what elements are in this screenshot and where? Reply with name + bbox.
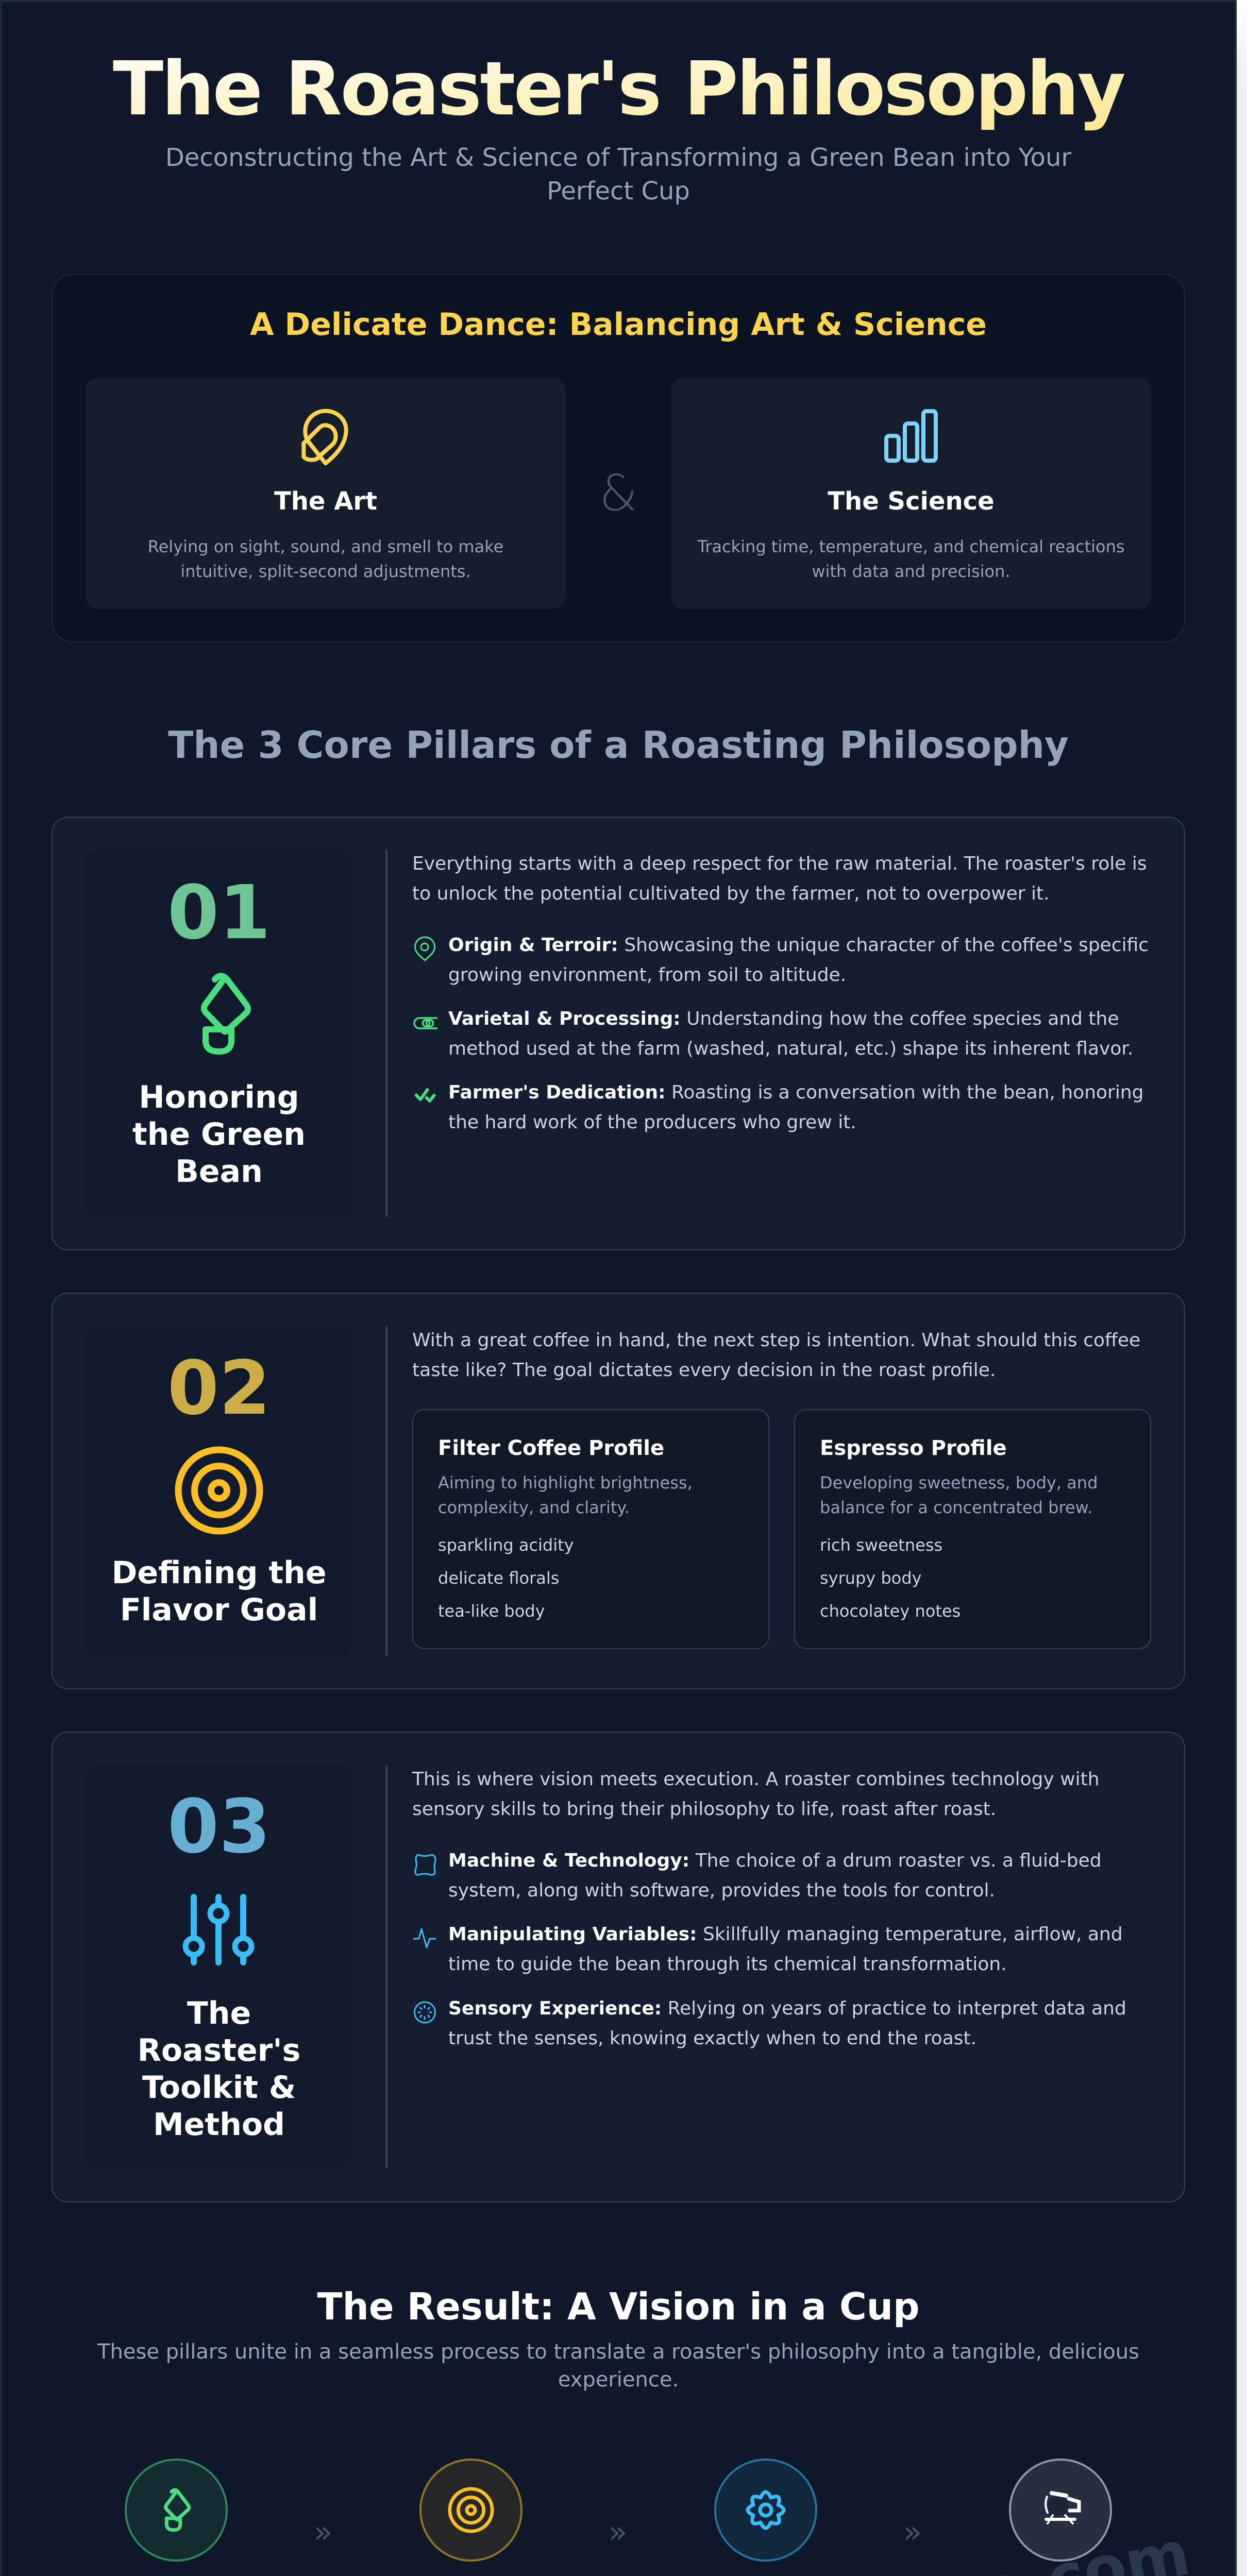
ampersand: & bbox=[599, 464, 637, 522]
circle: goal bbox=[419, 2459, 523, 2562]
icon: location pin bbox=[414, 937, 435, 961]
arrow: » bbox=[314, 2514, 332, 2550]
pillar 1 title bbox=[132, 1079, 306, 1190]
divider bbox=[385, 1765, 387, 2168]
panel: art and science bbox=[52, 274, 1185, 642]
icon: art bbox=[301, 409, 348, 466]
pillar 3 intro bbox=[412, 1769, 1100, 1820]
filter flavor list: sparkling acidity bbox=[438, 1535, 574, 1555]
filter description: Aiming to highlight brightness, bbox=[438, 1473, 693, 1493]
filter description: complexity, and clarity. bbox=[438, 1498, 630, 1517]
text: science description: with data and precision. bbox=[812, 562, 1010, 581]
item: sensory experience: Sensory Experience: Relying on years of practice to interpret data and bbox=[448, 1998, 1126, 2019]
subtitle bbox=[165, 143, 1072, 206]
heading: the result: The Result: A Vision in a Cup bbox=[317, 2285, 920, 2328]
item: origin and terroir: growing environment, from soil to altitude. bbox=[448, 964, 846, 986]
item: farmer's dedication bbox=[448, 1082, 1144, 1133]
card: filter profile bbox=[412, 1409, 769, 1649]
espresso heading: Espresso Profile bbox=[820, 1436, 1007, 1460]
item: varietal and processing: method used at the farm (washed, natural, etc.) shape its inherent flavor. bbox=[448, 1038, 1133, 1059]
pillar 1 intro: to unlock the potential cultivated by the farmer, not to overpower it. bbox=[412, 883, 1050, 904]
pillar 3 intro: sensory skills to bring their philosophy to life, roast after roast. bbox=[412, 1799, 996, 1820]
icon: machine bbox=[412, 1852, 438, 1878]
item: origin and terroir bbox=[448, 935, 1149, 986]
subtitle: Perfect Cup bbox=[547, 177, 690, 206]
text: result description: These pillars unite in a seamless process to translate a roaster's philosophy into a tangible, delicious bbox=[97, 2340, 1139, 2364]
icon: cup bbox=[1035, 2484, 1086, 2536]
pillar 3 title: Toolkit & bbox=[142, 2070, 296, 2106]
icon: target bbox=[175, 1447, 263, 1534]
heading: delicate dance: A Delicate Dance: Balancing Art & Science bbox=[250, 307, 987, 343]
pillar 1 intro: Everything starts with a deep respect for the raw material. The roaster's role is bbox=[412, 853, 1147, 874]
icon: gear bbox=[740, 2484, 791, 2536]
pillar 2 intro bbox=[412, 1330, 1140, 1381]
text: science description bbox=[697, 537, 1125, 581]
item: machine and technology bbox=[448, 1846, 1102, 1905]
circle: bean bbox=[125, 2459, 228, 2562]
arrow: » bbox=[609, 2514, 627, 2550]
pillar 1 title: Bean bbox=[175, 1154, 263, 1190]
pillar 1 title: Honoring bbox=[139, 1079, 299, 1115]
espresso flavor list: chocolatey notes bbox=[820, 1601, 960, 1621]
filter flavor list: delicate florals bbox=[438, 1568, 559, 1588]
pillar 3 summary bbox=[86, 1765, 352, 2168]
card: the science bbox=[671, 378, 1151, 609]
number 02: 02 bbox=[167, 1345, 271, 1431]
circle: method bbox=[714, 2459, 817, 2562]
icon: bean small bbox=[150, 2484, 202, 2536]
text: art description: intuitive, split-second adjustments. bbox=[180, 562, 471, 581]
item: farmer's dedication: Farmer's Dedication: Roasting is a conversation with the bean, honoring bbox=[448, 1082, 1144, 1103]
filter flavor list: tea-like body bbox=[438, 1601, 545, 1621]
pillar 3 title: Method bbox=[153, 2107, 285, 2143]
panel: pillar 2 bbox=[52, 1293, 1185, 1689]
step: the goal bbox=[368, 2459, 574, 2576]
espresso flavor list: rich sweetness bbox=[820, 1535, 942, 1555]
text: science description: Tracking time, temperature, and chemical reactions bbox=[697, 537, 1125, 556]
item: machine and technology: Machine & Technology: The choice of a drum roaster vs. a fluid-bed bbox=[448, 1850, 1102, 1871]
arrow: » bbox=[903, 2514, 922, 2550]
text: result description: experience. bbox=[558, 2368, 679, 2392]
icon: bean bbox=[201, 973, 251, 1055]
circle: final cup bbox=[1009, 2459, 1112, 2562]
heading: the art: The Art bbox=[274, 487, 377, 516]
item: manipulating variables: time to guide the bean through its chemical transformation. bbox=[448, 1954, 1007, 1975]
espresso flavor list: syrupy body bbox=[820, 1568, 922, 1588]
item: varietal and processing: Varietal & Processing: Understanding how the coffee species and the bbox=[448, 1008, 1119, 1029]
pillar 2 intro: With a great coffee in hand, the next step is intention. What should this coffee bbox=[412, 1330, 1140, 1351]
icon: pulse bbox=[412, 1926, 438, 1949]
step: the final cup bbox=[957, 2459, 1164, 2576]
espresso description: Developing sweetness, body, and bbox=[820, 1473, 1098, 1493]
pillar 2 summary bbox=[86, 1326, 352, 1656]
step: the bean bbox=[73, 2459, 279, 2576]
divider bbox=[385, 1326, 387, 1656]
item: sensory experience bbox=[448, 1994, 1126, 2053]
number 01: 01 bbox=[167, 869, 271, 956]
pillar 3 intro: This is where vision meets execution. A roaster combines technology with bbox=[412, 1769, 1100, 1790]
section heading: core pillars: The 3 Core Pillars of a Roasting Philosophy bbox=[168, 723, 1069, 767]
espresso description bbox=[820, 1473, 1098, 1517]
icon: science bbox=[884, 409, 938, 463]
icon: target small bbox=[445, 2484, 497, 2536]
item: origin and terroir: Origin & Terroir: Showcasing the unique character of the coffee's specific bbox=[448, 935, 1149, 956]
panel: pillar 3 bbox=[52, 1732, 1185, 2202]
item: manipulating variables: Manipulating Variables: Skillfully managing temperature, airflow, and bbox=[448, 1924, 1123, 1945]
pillar 3 title: The bbox=[187, 1995, 251, 2031]
icon: varietal bbox=[413, 1017, 437, 1029]
item: sensory experience: trust the senses, knowing exactly when to end the roast. bbox=[448, 2028, 976, 2049]
title: The Roaster's Philosophy bbox=[113, 45, 1124, 132]
pillar 1 title: the Green bbox=[132, 1116, 306, 1153]
pillar 2 title: Defining the bbox=[112, 1555, 326, 1591]
text: art description bbox=[148, 537, 503, 581]
divider bbox=[385, 850, 387, 1217]
pillar 1 intro bbox=[412, 853, 1147, 904]
text: result description bbox=[0, 2338, 1237, 2394]
pillar 2 intro: taste like? The goal dictates every decision in the roast profile. bbox=[412, 1360, 996, 1381]
filter description bbox=[438, 1473, 693, 1517]
item: manipulating variables bbox=[448, 1920, 1123, 1979]
pillar 2 title: Flavor Goal bbox=[120, 1592, 318, 1628]
card: espresso profile bbox=[794, 1409, 1151, 1649]
number 03: 03 bbox=[167, 1783, 271, 1870]
filter heading: Filter Coffee Profile bbox=[438, 1436, 664, 1460]
icon: double check bbox=[414, 1088, 436, 1103]
step: the method bbox=[663, 2459, 869, 2576]
item: varietal and processing bbox=[448, 1008, 1133, 1059]
item: farmer's dedication: the hard work of the producers who grew it. bbox=[448, 1112, 856, 1133]
pillar 3 title: Roaster's bbox=[138, 2032, 300, 2069]
pillar 1 summary bbox=[86, 850, 352, 1217]
panel: pillar 1 bbox=[52, 817, 1185, 1250]
item: machine and technology: system, along with software, provides the tools for control. bbox=[448, 1880, 995, 1901]
card: the art bbox=[86, 378, 566, 609]
icon: sliders bbox=[182, 1894, 255, 1965]
filter flavor list bbox=[438, 1535, 574, 1621]
subtitle: Deconstructing the Art & Science of Transforming a Green Bean into Your bbox=[165, 143, 1071, 172]
espresso description: balance for a concentrated brew. bbox=[820, 1498, 1092, 1517]
pillar 3 title bbox=[138, 1995, 300, 2143]
pillar 2 title bbox=[112, 1555, 326, 1628]
icon: senses bbox=[412, 1998, 438, 2026]
text: art description: Relying on sight, sound, and smell to make bbox=[148, 537, 503, 556]
heading: the science: The Science bbox=[828, 487, 995, 516]
espresso flavor list bbox=[820, 1535, 960, 1621]
